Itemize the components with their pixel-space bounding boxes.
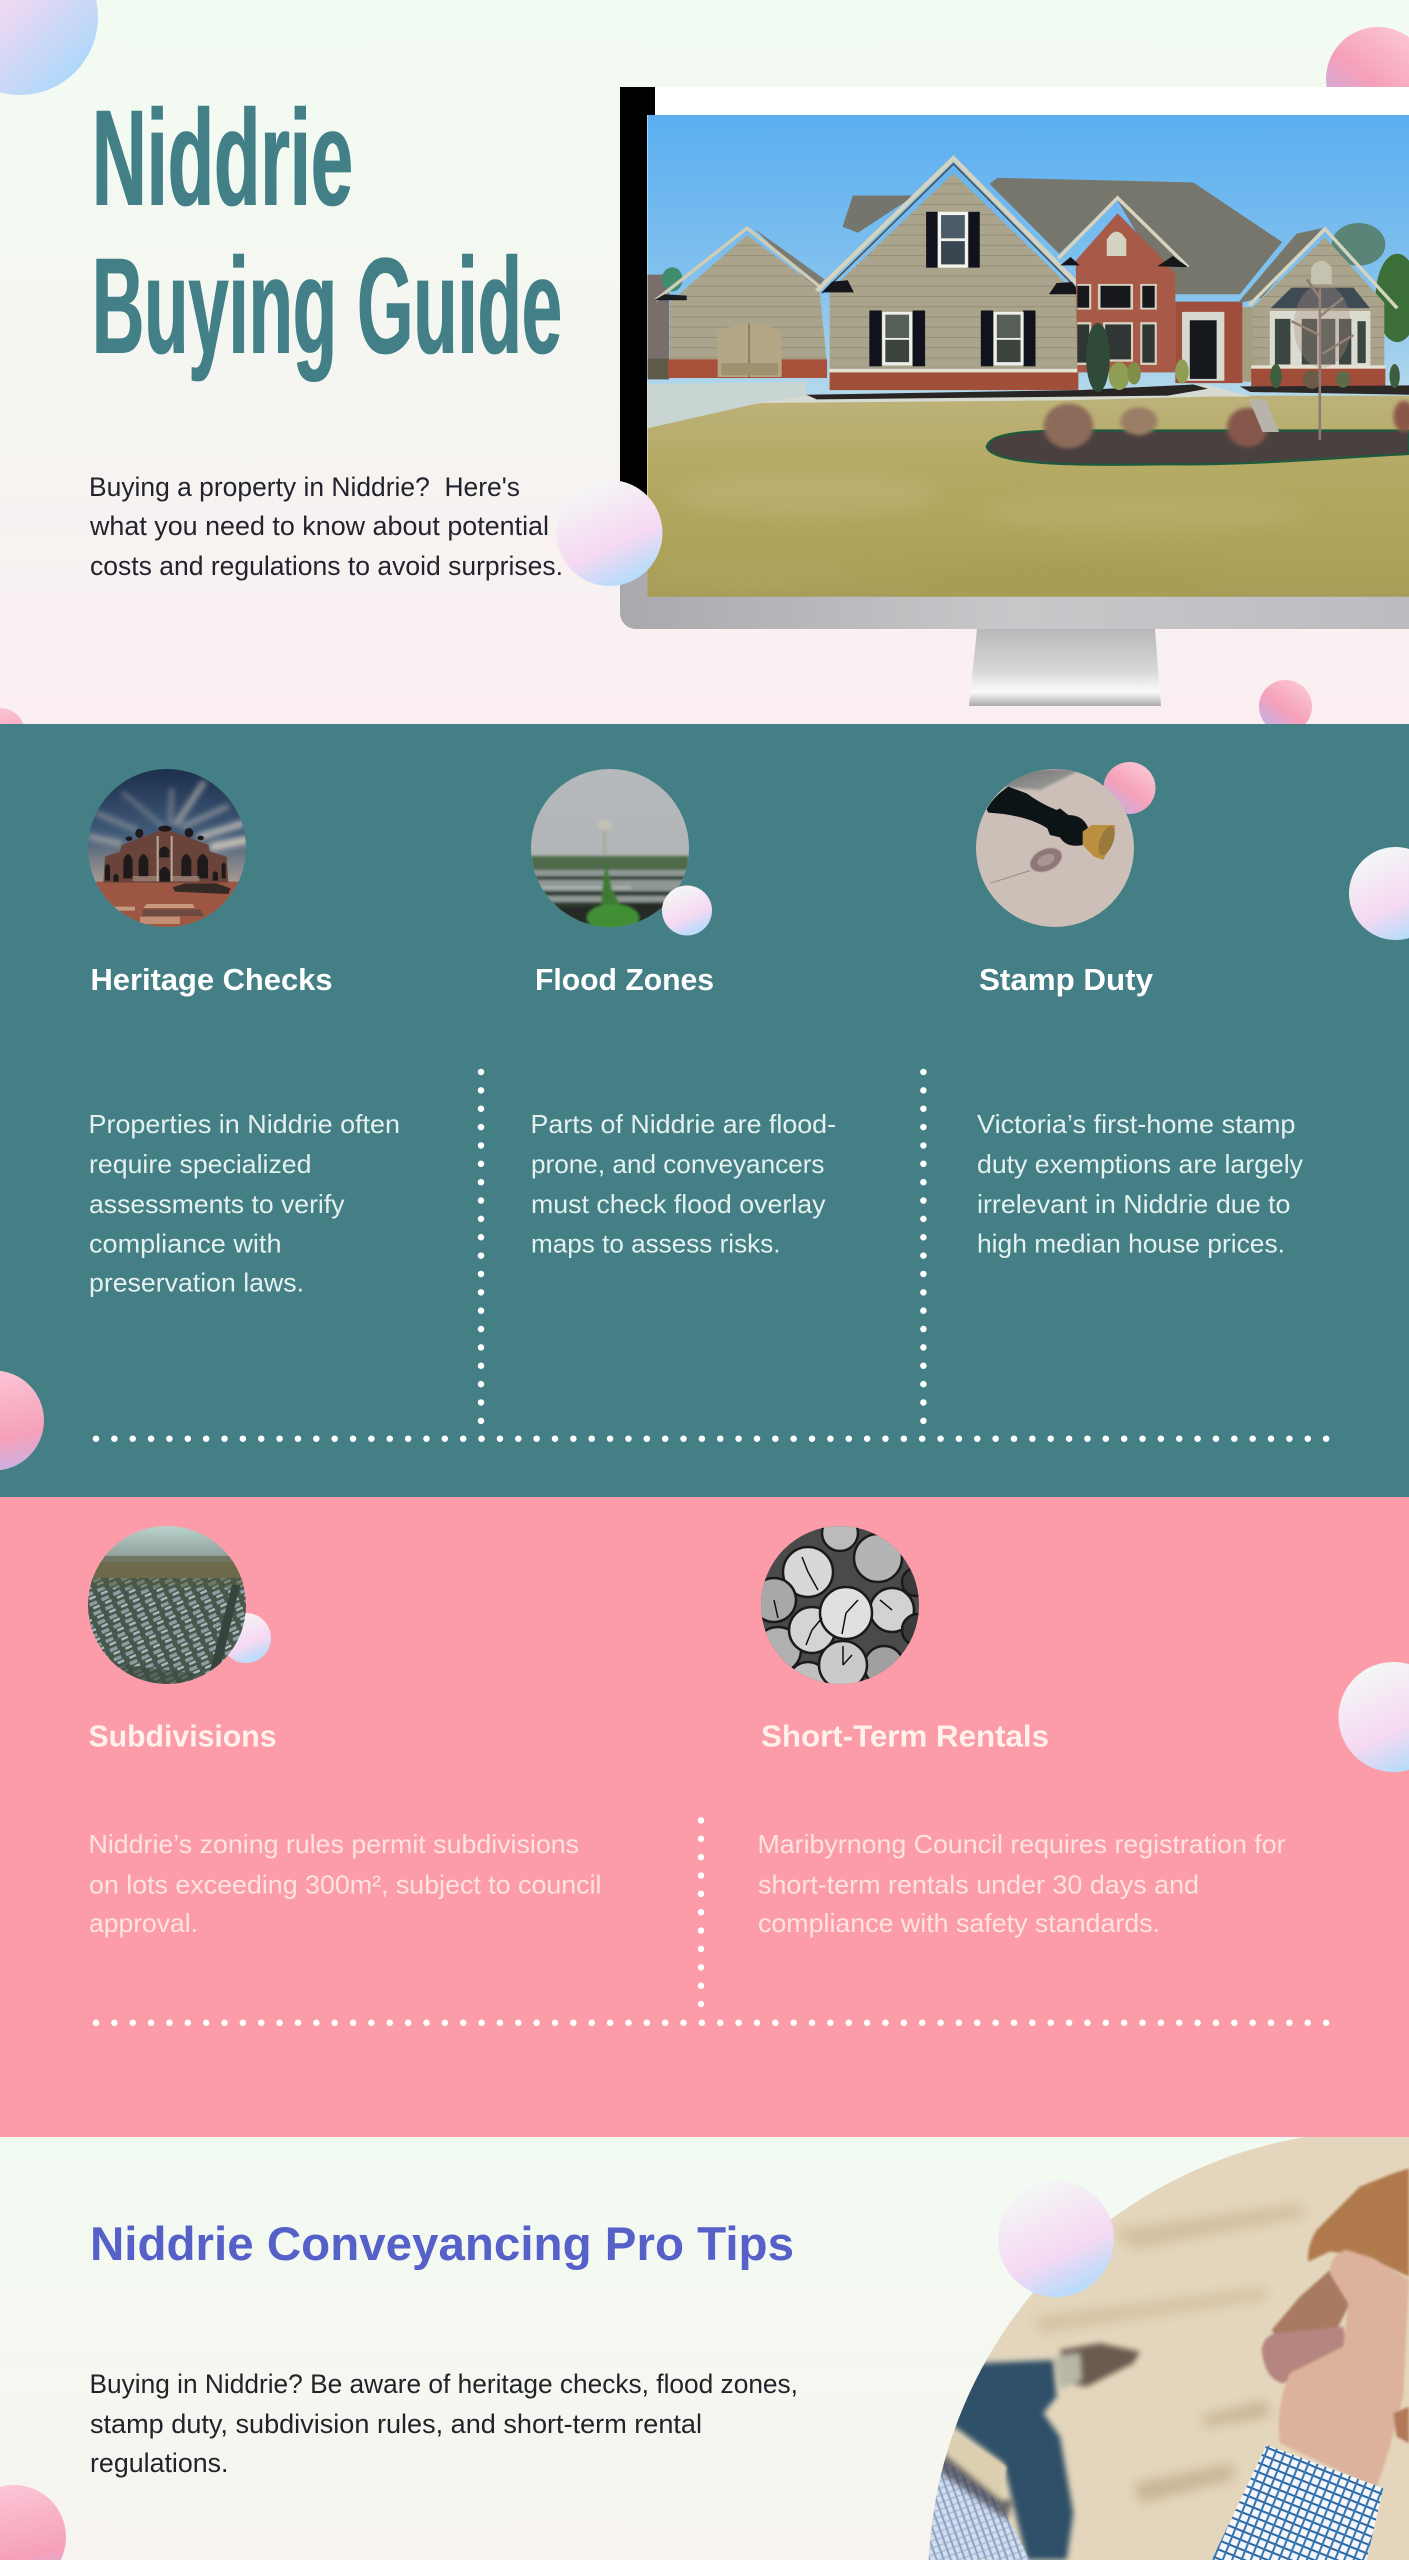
dotted dividers: pink section — [96, 1820, 1327, 2023]
heading: pro tips: Niddrie Conveyancing Pro Tips — [90, 2217, 794, 2270]
dotted dividers: teal section — [96, 1072, 1327, 1439]
text: short-term rentals: short-term rentals under 30 days and — [758, 1870, 1199, 1900]
text: flood zones: must check flood overlay — [531, 1189, 826, 1219]
title: Buying Guide — [92, 230, 562, 383]
text: short-term rentals: compliance with safety standards. — [758, 1908, 1160, 1938]
intro text — [89, 472, 563, 581]
heading: flood zones: Flood Zones — [535, 962, 714, 997]
intro text: costs and regulations to avoid surprises. — [90, 551, 563, 581]
photo: heritage building — [88, 769, 248, 928]
monitor stand — [969, 629, 1161, 706]
card: stamp duty — [976, 762, 1303, 1258]
decorative bubble: top right — [1326, 27, 1409, 131]
text: heritage checks — [88, 1109, 400, 1298]
photo: house — [647, 115, 1409, 597]
decorative bubble: right — [1349, 847, 1409, 940]
card: heritage checks — [88, 769, 400, 1298]
decorative bubble: tips top — [998, 2181, 1114, 2297]
text: subdivisions: on lots exceeding 300m², subject to council — [89, 1870, 602, 1900]
decorative bubble: subdivisions — [221, 1613, 271, 1663]
heading: subdivisions: Subdivisions — [88, 1718, 276, 1754]
photo: handshake — [900, 2130, 1409, 2560]
text: pro tips body: regulations. — [90, 2448, 228, 2478]
text: stamp duty: high median house prices. — [977, 1228, 1285, 1258]
text: short-term rentals: Maribyrnong Council requires registration for — [758, 1829, 1286, 1859]
monitor chin — [620, 560, 1409, 629]
decorative bubble: centre overlapping monitor — [556, 480, 662, 586]
heading: short-term rentals: Short-Term Rentals — [761, 1718, 1049, 1754]
card: flood zones — [530, 769, 836, 1258]
text: stamp duty: irrelevant in Niddrie due to — [977, 1189, 1290, 1219]
text: flood zones: prone, and conveyancers — [531, 1149, 824, 1179]
decorative bubble: top left — [0, 0, 98, 95]
text: heritage checks: Properties in Niddrie often — [88, 1109, 400, 1139]
title: Niddrie — [92, 82, 353, 235]
heading: stamp duty: Stamp Duty — [979, 962, 1154, 997]
decorative bubble: stamp duty — [1104, 762, 1156, 814]
panel: pink section — [0, 1497, 1409, 2137]
decorative bubble: right — [1338, 1662, 1409, 1772]
text: flood zones — [530, 1109, 836, 1258]
card: subdivisions — [88, 1526, 602, 1938]
card: short-term rentals — [752, 1515, 1286, 1938]
text: heritage checks: compliance with — [89, 1228, 282, 1258]
photo: wax seal stamp — [976, 768, 1135, 928]
heading: heritage checks: Heritage Checks — [90, 962, 332, 997]
monitor bezel — [620, 87, 1409, 567]
title — [92, 82, 562, 383]
decorative bubble: flood zones — [662, 886, 712, 936]
decorative bubble: tips lower left — [0, 2485, 66, 2560]
text: heritage checks: preservation laws. — [89, 1268, 304, 1298]
intro text: what you need to know about potential — [89, 511, 549, 541]
text: short-term rentals — [758, 1829, 1286, 1938]
panel: tips section — [0, 2130, 1409, 2560]
text: stamp duty — [977, 1109, 1303, 1258]
text: subdivisions — [88, 1829, 602, 1938]
text: stamp duty: Victoria’s first-home stamp — [977, 1109, 1296, 1139]
monitor with house photo — [620, 87, 1409, 706]
text: subdivisions: Niddrie’s zoning rules permit subdivisions — [88, 1829, 579, 1859]
intro text: Buying a property in Niddrie? Here's — [89, 472, 520, 502]
text: pro tips body: Buying in Niddrie? Be aware of heritage checks, flood zones, — [90, 2369, 798, 2399]
decorative bubble: left — [0, 1370, 44, 1470]
text: subdivisions: approval. — [89, 1908, 198, 1938]
text: heritage checks: assessments to verify — [89, 1189, 344, 1219]
text: heritage checks: require specialized — [89, 1149, 312, 1179]
photo: clocks — [761, 1526, 919, 1684]
panel: hero — [0, 0, 1409, 758]
decorative bubble: lower left — [0, 708, 25, 758]
decorative bubble: lower right — [1259, 680, 1312, 733]
panel: teal section — [0, 724, 1409, 1497]
photo: flood plain — [531, 769, 689, 932]
text: flood zones: Parts of Niddrie are flood- — [530, 1109, 836, 1139]
text: flood zones: maps to assess risks. — [531, 1228, 780, 1258]
text: stamp duty: duty exemptions are largely — [977, 1149, 1303, 1179]
text: pro tips body — [90, 2369, 798, 2478]
text: pro tips body: stamp duty, subdivision rules, and short-term rental — [90, 2409, 702, 2439]
photo: aerial suburb — [88, 1526, 246, 1686]
